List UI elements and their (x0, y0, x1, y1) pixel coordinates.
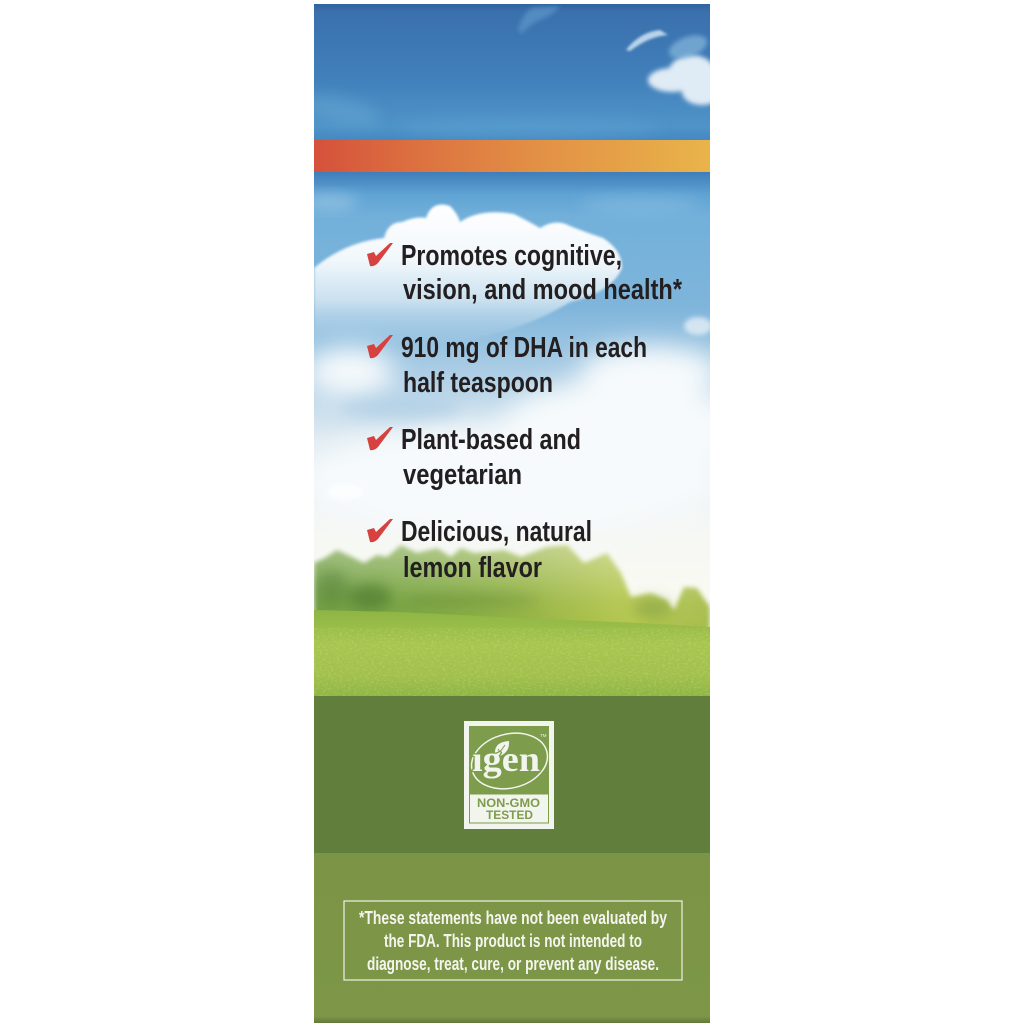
cloud: top right (626, 30, 722, 105)
item: DHA: half teaspoon (403, 367, 553, 399)
badge oval (466, 725, 553, 797)
icon: leaf with check (495, 741, 509, 756)
item: cognitive (367, 240, 683, 306)
igen wordmark: ıgen (472, 739, 540, 779)
item: plant-based: vegetarian (403, 459, 522, 491)
badge label (470, 794, 548, 823)
non-GMO badge (464, 721, 554, 829)
item: lemon flavor: Delicious, natural (401, 516, 592, 548)
lower sky and landscape (300, 172, 740, 696)
item: DHA (367, 332, 647, 399)
non-GMO badge: TM (540, 733, 547, 738)
top sky band (298, 4, 722, 140)
item: DHA: 910 mg of DHA in each (401, 332, 647, 364)
product panel illustration (314, 4, 710, 1023)
item: plant-based (367, 424, 581, 491)
FDA disclaimer box (344, 901, 682, 980)
FDA disclaimer box: *These statements have not been evaluated by (359, 907, 668, 928)
icon: red check (367, 427, 393, 450)
olive disclaimer band (314, 853, 710, 1023)
icon: red check (367, 335, 393, 358)
item: lemon flavor: lemon flavor (403, 552, 542, 584)
cloud: small wisp (518, 6, 560, 34)
non-GMO badge: TESTED (486, 810, 533, 822)
icon: red check (367, 243, 393, 266)
item: cognitive: vision, and mood health* (403, 274, 683, 306)
non-GMO badge: NON-GMO (477, 798, 540, 810)
big cloud body (314, 204, 622, 345)
checklist (367, 240, 683, 584)
clouds behind the list (314, 188, 710, 500)
orange gradient stripe (314, 140, 710, 172)
FDA disclaimer box: the FDA. This product is not intended to (384, 930, 642, 951)
tree line (314, 542, 710, 627)
FDA disclaimer box: diagnose, treat, cure, or prevent any disease. (367, 953, 659, 974)
icon: red check (367, 519, 393, 542)
grass field (314, 610, 710, 696)
item: lemon flavor (367, 516, 592, 584)
item: cognitive: Promotes cognitive, (401, 240, 622, 272)
item: plant-based: Plant-based and (401, 424, 581, 456)
dark green logo band (314, 696, 710, 853)
